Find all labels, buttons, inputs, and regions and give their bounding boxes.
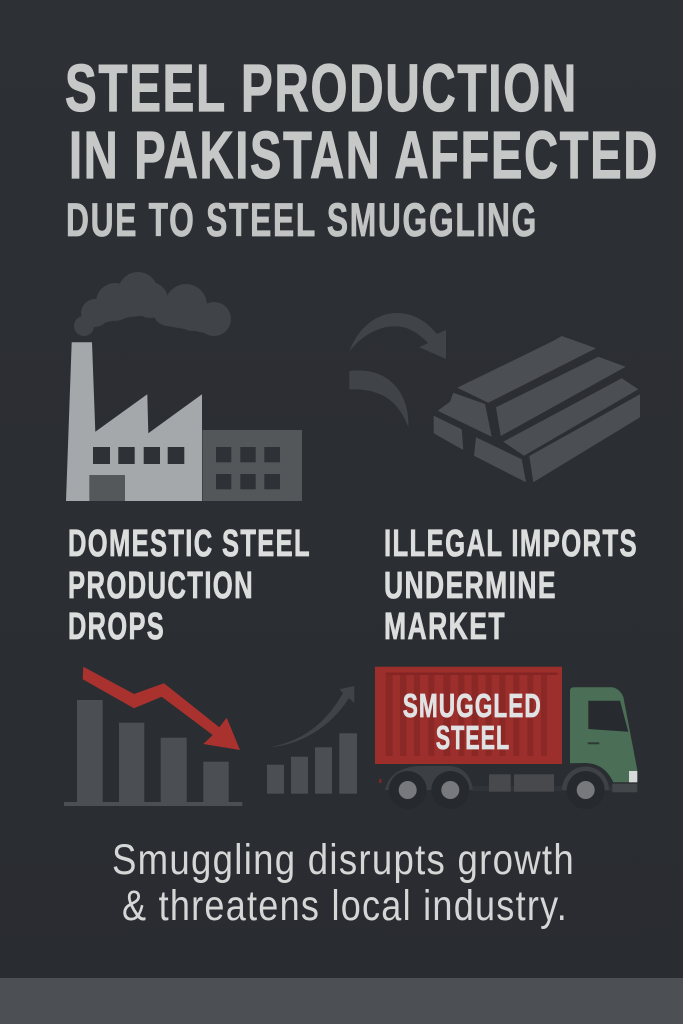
truck cab (570, 687, 637, 782)
rising bars (267, 733, 357, 794)
text: domestic steel production drops: PRODUCTION (68, 565, 254, 607)
cargo container (375, 667, 562, 764)
tail light (379, 779, 382, 783)
falling bars (64, 700, 242, 806)
factory main building and chimney (66, 342, 202, 501)
icon: stacked steel ingots (434, 336, 640, 482)
container label: STEEL (436, 719, 510, 756)
truck rear wheel arch (385, 766, 473, 790)
container label (403, 687, 542, 756)
text: illegal imports undermine market (384, 523, 638, 648)
icon: curved import arrows (349, 313, 446, 427)
arrow: grey upward trend (269, 686, 354, 747)
chart: small rising bars with arrow (267, 686, 357, 794)
conclusion text: & threatens local industry. (122, 882, 568, 930)
bottom band (0, 978, 683, 1024)
chart: falling bars with red arrow (64, 667, 242, 806)
cab door handle (588, 742, 599, 744)
text: domestic steel production drops: DROPS (68, 606, 165, 648)
wheels (389, 766, 609, 809)
bumper (612, 784, 637, 792)
text: domestic steel production drops (68, 523, 311, 648)
icon: factory with smoke (66, 272, 302, 501)
conclusion text (112, 836, 575, 930)
text: illegal imports undermine market: UNDERMINE (384, 565, 557, 607)
container label: SMUGGLED (403, 687, 542, 724)
factory annex building (202, 430, 302, 501)
cab window (588, 701, 628, 732)
text: domestic steel production drops: DOMESTIC STEEL (68, 523, 311, 565)
truck chassis rail (473, 786, 613, 791)
icon: smoke cloud (74, 272, 231, 336)
headlight (629, 771, 637, 782)
truck cargo boxes (489, 774, 554, 792)
title (65, 51, 659, 193)
icon: smuggled steel truck (375, 667, 637, 809)
arrow: red downward trend (83, 667, 240, 750)
text: illegal imports undermine market: MARKET (384, 606, 506, 648)
conclusion text: Smuggling disrupts growth (112, 836, 575, 884)
